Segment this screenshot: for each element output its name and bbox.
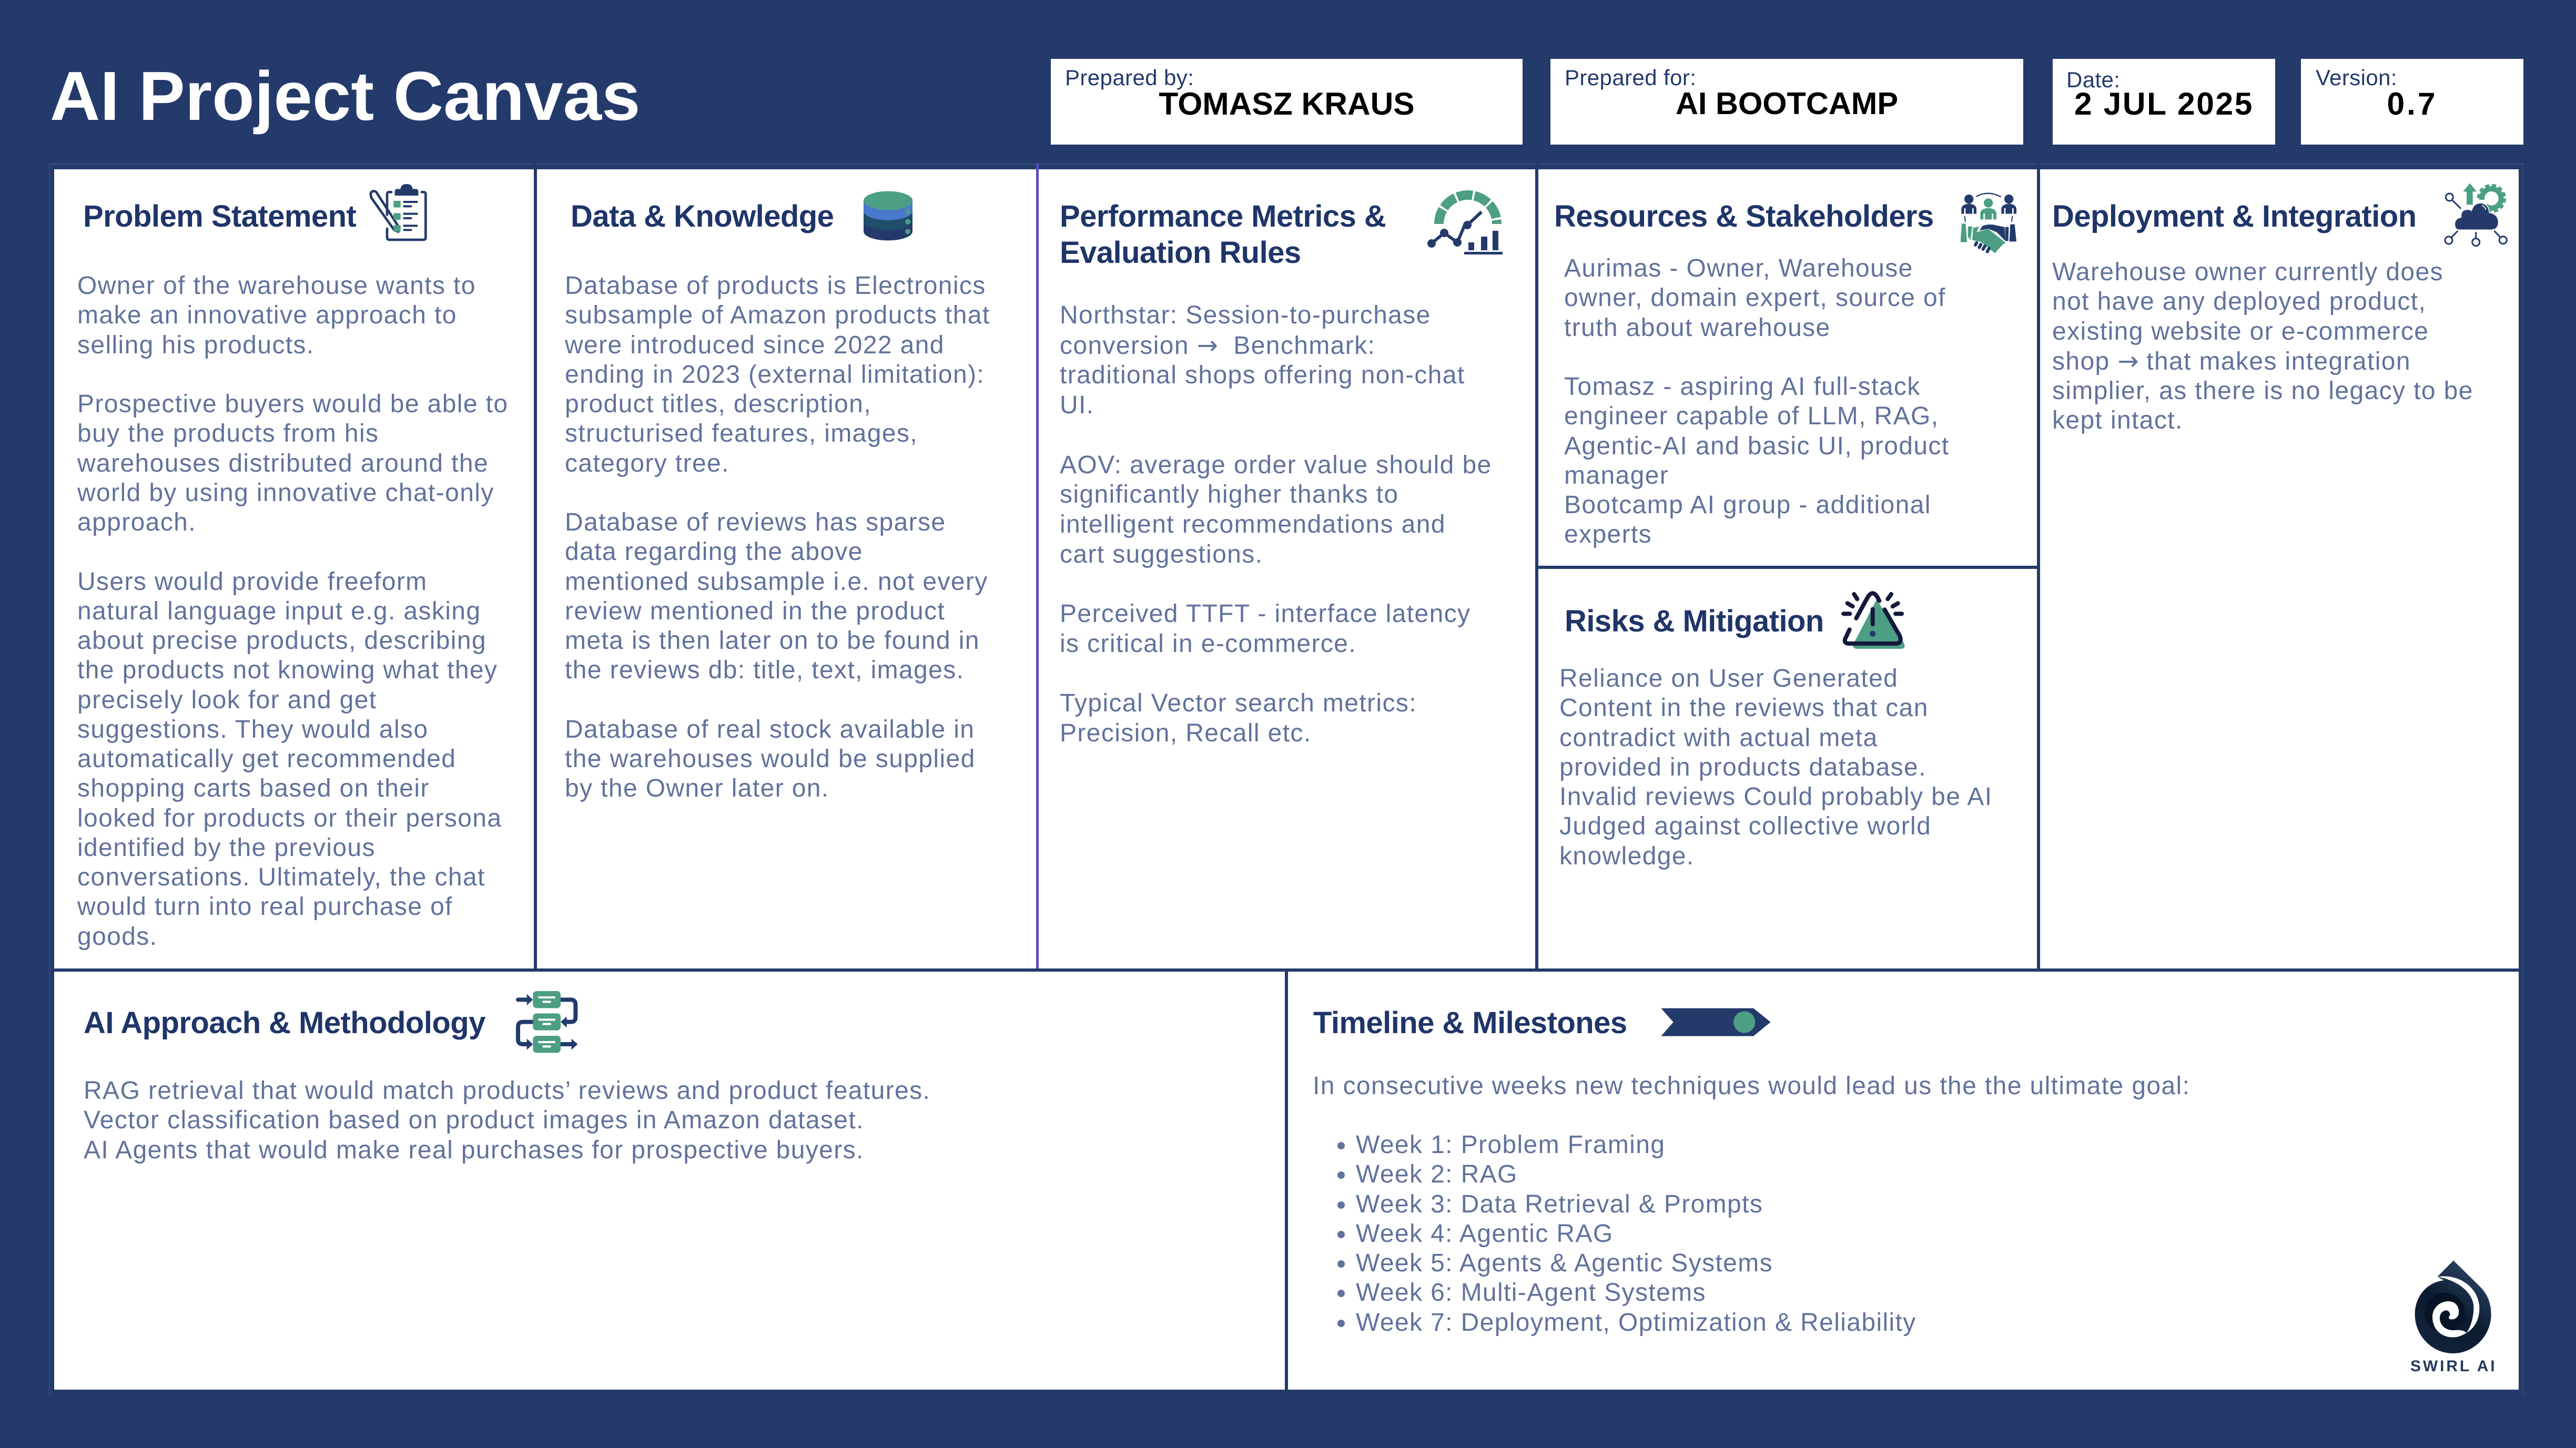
text: performance metrics body: UI. — [1060, 391, 1094, 419]
text: resources and stakeholders body: truth about warehouse — [1564, 313, 1831, 342]
text: performance metrics body — [1060, 301, 1492, 747]
text: risks and mitigation body: contradict with actual meta — [1559, 723, 1878, 752]
list: weekly milestones: Week 3: Data Retrieval & Prompts — [1356, 1190, 1763, 1218]
text: problem statement body — [77, 272, 508, 951]
text: problem statement body: precisely look for and get — [77, 686, 377, 714]
list: weekly milestones: Week 1: Problem Framing — [1356, 1131, 1665, 1159]
text: ai approach body: RAG retrieval that would match products’ reviews and product features. — [84, 1077, 930, 1105]
value: prepared by: TOMASZ KRAUS — [1159, 86, 1415, 121]
text: performance metrics body: AOV: average order value should be — [1060, 451, 1492, 479]
text: ai approach body: AI Agents that would make real purchases for prospective buyers. — [84, 1136, 864, 1164]
text: performance metrics body: Northstar: Session-to-purchase — [1060, 301, 1431, 329]
text: data and knowledge body: the warehouses would be supplied — [565, 745, 976, 773]
text: resources and stakeholders body: owner, domain expert, source of — [1564, 284, 1946, 312]
panel: date — [2053, 59, 2275, 145]
list: weekly milestones: Week 4: Agentic RAG — [1356, 1220, 1614, 1248]
label: version: Version: — [2316, 65, 2397, 90]
text: resources and stakeholders body: Aurimas - Owner, Warehouse — [1564, 254, 1913, 282]
text: problem statement body: about precise products, describing — [77, 627, 486, 655]
icon: milestone arrow — [1630, 988, 1788, 1052]
text: data and knowledge body: review mentioned in the product — [565, 597, 945, 625]
panel: timeline and milestones — [1288, 972, 2519, 1390]
text: data and knowledge body: structurised features, images, — [565, 420, 918, 447]
text: data and knowledge body: subsample of Amazon products that — [565, 301, 990, 329]
logo mark — [2367, 1236, 2556, 1393]
heading: ai approach and methodology: AI Approach & Methodology — [84, 1006, 485, 1040]
heading: deployment and integration: Deployment & Integration — [2052, 199, 2417, 233]
icon: database — [864, 191, 913, 241]
logo: swirl ai — [2367, 1236, 2556, 1383]
panel: performance metrics — [1060, 190, 1503, 747]
icon: clipboard checklist — [369, 184, 427, 241]
text: problem statement body: natural language input e.g. asking — [77, 597, 481, 625]
text: deployment and integration body: not have any deployed product, — [2052, 288, 2426, 315]
heading: performance metrics: Performance Metrics & — [1060, 199, 1386, 233]
text: problem statement body: suggestions. They would also — [77, 716, 428, 743]
text: risks and mitigation body: Reliance on User Generated — [1559, 665, 1898, 692]
text: resources and stakeholders body: manager — [1564, 462, 1669, 490]
label: date: Date: — [2066, 67, 2120, 92]
text: data and knowledge body: were introduced since 2022 and — [565, 331, 945, 359]
list: weekly milestones: Week 5: Agents & Agentic Systems — [1356, 1249, 1773, 1277]
text: data and knowledge body: meta is then later on to be found in — [565, 627, 980, 655]
text: data and knowledge body: Database of reviews has sparse — [565, 508, 946, 536]
logo wordmark: SWIRL AI — [2410, 1358, 2497, 1375]
text: performance metrics body: Perceived TTFT - interface latency — [1060, 600, 1470, 628]
text: performance metrics body: intelligent recommendations and — [1060, 511, 1446, 538]
icon: warning triangle — [1841, 591, 1905, 649]
text: problem statement body: Owner of the warehouse wants to — [77, 272, 476, 300]
text: data and knowledge body: category tree. — [565, 449, 729, 477]
panel: version — [2301, 59, 2523, 145]
list: weekly milestones: Week 7: Deployment, Optimization & Reliability — [1356, 1308, 1916, 1337]
text: data and knowledge body: the reviews db: title, text, images. — [565, 656, 964, 684]
text: data and knowledge body: Database of products is Electronics — [565, 272, 986, 300]
text: data and knowledge body: by the Owner later on. — [565, 774, 829, 802]
text: deployment and integration body: Warehouse owner currently does — [2052, 258, 2443, 286]
panel: risks and mitigation — [1559, 591, 1992, 870]
text: deployment and integration body: kept intact. — [2052, 406, 2183, 434]
text: data and knowledge body — [565, 272, 990, 802]
value: date: 2 JUL 2025 — [2074, 86, 2254, 121]
text: resources and stakeholders body: Tomasz - aspiring AI full-stack — [1564, 373, 1921, 401]
value: version: 0.7 — [2387, 86, 2438, 121]
text: timeline intro: In consecutive weeks new techniques would lead us the the ultimate goal: — [1313, 1072, 2190, 1100]
text: resources and stakeholders body: experts — [1564, 521, 1652, 548]
heading: resources and stakeholders: Resources & Stakeholders — [1554, 199, 1934, 233]
text: deployment and integration body: existing website or e-commerce — [2052, 318, 2429, 345]
panel: prepared by — [1051, 59, 1523, 145]
label: prepared by: Prepared by: — [1065, 65, 1194, 90]
text: problem statement body: shopping carts based on their — [77, 774, 430, 802]
text: deployment and integration body: shop → that makes integration — [2052, 346, 2411, 376]
text: ai approach body — [84, 1077, 930, 1164]
icon: gauge and chart — [1427, 190, 1503, 254]
text: resources and stakeholders body — [1564, 254, 1950, 548]
text: risks and mitigation body: Invalid reviews Could probably be AI — [1559, 783, 1992, 811]
text: resources and stakeholders body: Bootcamp AI group - additional — [1564, 491, 1931, 519]
list: weekly milestones: Week 6: Multi-Agent Systems — [1356, 1279, 1706, 1307]
heading: problem statement: Problem Statement — [83, 199, 356, 233]
text: risks and mitigation body: Content in the reviews that can — [1559, 694, 1929, 722]
heading: risks and mitigation: Risks & Mitigation — [1565, 604, 1824, 638]
text: risks and mitigation body: Judged against collective world — [1559, 812, 1931, 840]
text: performance metrics body: cart suggestions. — [1060, 541, 1263, 568]
text: problem statement body: the products not knowing what they — [77, 656, 498, 684]
text: data and knowledge body: Database of real stock available in — [565, 716, 975, 743]
text: problem statement body: looked for products or their persona — [77, 804, 502, 832]
label: prepared for: Prepared for: — [1565, 65, 1696, 90]
value: prepared for: AI BOOTCAMP — [1676, 86, 1898, 121]
text: problem statement body: Users would provide freeform — [77, 568, 428, 595]
text: problem statement body: conversations. Ultimately, the chat — [77, 863, 485, 891]
text: deployment and integration body — [2052, 258, 2473, 434]
text: performance metrics body: is critical in e-commerce. — [1060, 630, 1356, 658]
heading: performance metrics — [1060, 199, 1386, 270]
list: weekly milestones — [1356, 1130, 1916, 1338]
text: risks and mitigation body — [1559, 665, 1992, 870]
text: performance metrics body: traditional shops offering non-chat — [1060, 361, 1465, 389]
text: risks and mitigation body: knowledge. — [1559, 842, 1695, 870]
text: resources and stakeholders body: Agentic-AI and basic UI, product — [1564, 432, 1950, 460]
text: performance metrics body: significantly higher thanks to — [1060, 481, 1398, 508]
heading: data and knowledge: Data & Knowledge — [571, 199, 834, 233]
panel: resources and stakeholders — [1554, 192, 2016, 548]
heading: performance metrics: Evaluation Rules — [1060, 236, 1301, 270]
text: problem statement body: make an innovative approach to — [77, 301, 457, 329]
text: problem statement body: buy the products from his — [77, 420, 379, 447]
text: risks and mitigation body: provided in products database. — [1559, 753, 1926, 781]
panel: problem statement — [77, 184, 508, 951]
text: data and knowledge body: ending in 2023 (external limitation): — [565, 361, 985, 389]
text: problem statement body: approach. — [77, 508, 196, 536]
text: problem statement body: selling his products. — [77, 331, 315, 359]
text: data and knowledge body: mentioned subsample i.e. not every — [565, 568, 988, 595]
heading: timeline and milestones: Timeline & Milestones — [1313, 1006, 1627, 1040]
title: AI Project Canvas — [50, 57, 640, 135]
panel: prepared for — [1550, 59, 2023, 145]
icon: team handshake — [1961, 192, 2016, 253]
list: weekly milestones: Week 2: RAG — [1356, 1160, 1518, 1188]
icon: cloud deployment — [2445, 183, 2508, 247]
text: problem statement body: goods. — [77, 922, 157, 951]
panel: deployment and integration — [2052, 183, 2508, 434]
text: problem statement body: world by using innovative chat-only — [77, 479, 494, 507]
text: data and knowledge body: product titles, description, — [565, 390, 871, 418]
text: problem statement body: would turn into real purchase of — [77, 893, 453, 921]
text: resources and stakeholders body: engineer capable of LLM, RAG, — [1564, 402, 1939, 430]
text: ai approach body: Vector classification based on product images in Amazon dataset. — [84, 1106, 864, 1134]
text: performance metrics body: Precision, Recall etc. — [1060, 719, 1312, 747]
text: data and knowledge body: data regarding the above — [565, 538, 863, 566]
panel: ai approach and methodology — [84, 991, 930, 1164]
icon: process flow — [516, 991, 577, 1053]
text: performance metrics body: conversion → Benchmark: — [1060, 331, 1375, 360]
panel: data and knowledge — [565, 191, 990, 802]
text: problem statement body: warehouses distributed around the — [77, 449, 489, 477]
text: problem statement body: automatically get recommended — [77, 745, 456, 773]
text: performance metrics body: Typical Vector search metrics: — [1060, 689, 1417, 717]
text: problem statement body: Prospective buyers would be able to — [77, 390, 508, 418]
text: deployment and integration body: simplier, as there is no legacy to be — [2052, 377, 2473, 405]
text: problem statement body: identified by the previous — [77, 834, 376, 862]
